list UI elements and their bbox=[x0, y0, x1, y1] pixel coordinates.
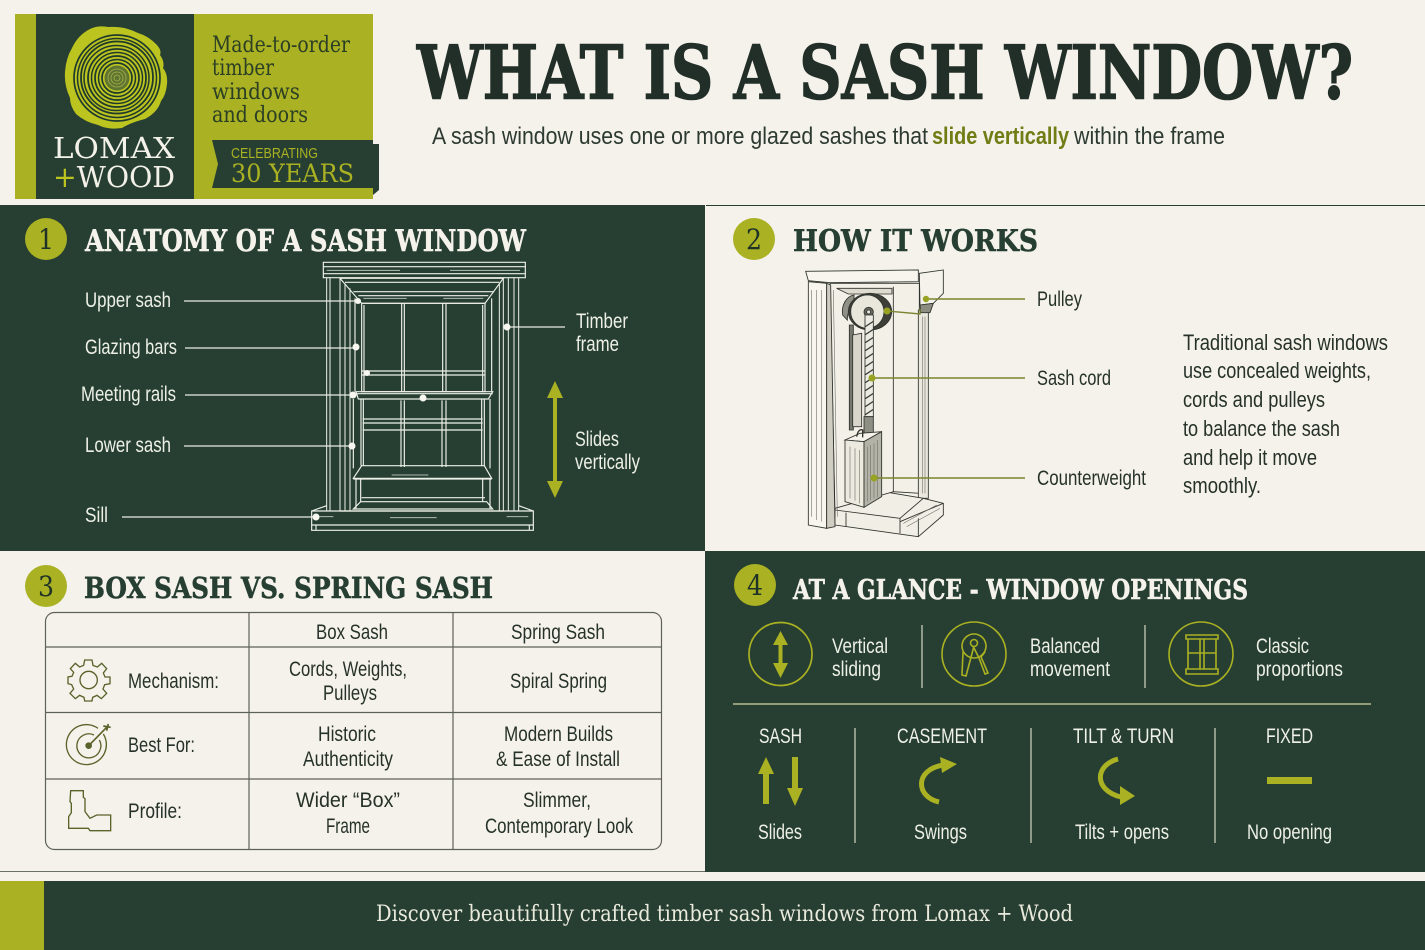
anatomy labels: Glazing bars bbox=[85, 336, 177, 359]
anniversary ribbon: 30 YEARS bbox=[231, 159, 354, 188]
heading: comparison: BOX SASH VS. SPRING SASH bbox=[84, 571, 493, 605]
table text: Frame bbox=[326, 815, 370, 838]
pulley labels bbox=[1037, 288, 1146, 490]
table text: Contemporary Look bbox=[485, 815, 633, 838]
subtitle: slide vertically bbox=[932, 123, 1070, 150]
table text: Spiral Spring bbox=[510, 670, 607, 693]
panel 2: how it works bbox=[706, 205, 1425, 537]
window type captions: No opening bbox=[1247, 821, 1332, 844]
table text: Slimmer, bbox=[523, 789, 591, 812]
number badge 1: 1 bbox=[38, 223, 54, 256]
explanation paragraph: use concealed weights, bbox=[1183, 358, 1371, 383]
table text: Modern Builds bbox=[504, 723, 613, 746]
subtitle: A sash window uses one or more glazed sashes that bbox=[432, 123, 928, 150]
anniversary ribbon: CELEBRATING bbox=[231, 145, 318, 162]
heading: how it works: HOW IT WORKS bbox=[793, 224, 1038, 259]
table text: & Ease of Install bbox=[496, 748, 620, 771]
tagline bbox=[212, 33, 351, 128]
brand name bbox=[53, 131, 175, 194]
footer banner bbox=[0, 872, 1425, 950]
pulley callout lines bbox=[872, 299, 1025, 478]
table text: Wider “Box” bbox=[296, 789, 400, 812]
table text: Best For: bbox=[128, 734, 195, 757]
window type captions: Slides bbox=[758, 821, 802, 844]
table text: Box Sash bbox=[316, 621, 388, 644]
icon: tilt and turn arrow bbox=[1100, 759, 1135, 805]
explanation paragraph bbox=[1183, 330, 1388, 498]
number badge 1 bbox=[25, 218, 67, 260]
icon: casement arrow bbox=[921, 757, 957, 802]
table text: Cords, Weights, bbox=[289, 658, 407, 681]
tagline: windows bbox=[212, 80, 300, 105]
feature labels bbox=[832, 635, 1343, 681]
number badge 2: 2 bbox=[746, 223, 762, 256]
panel 1: anatomy bbox=[0, 205, 705, 551]
window type names bbox=[759, 725, 1313, 748]
anatomy labels: Sill bbox=[85, 504, 108, 527]
number badge 4: 4 bbox=[747, 569, 763, 602]
feature labels: proportions bbox=[1256, 658, 1343, 681]
panel 3: box sash vs spring sash bbox=[25, 565, 662, 850]
logo block bbox=[15, 14, 379, 199]
feature labels: sliding bbox=[832, 658, 881, 681]
icon: classic proportions bbox=[1169, 622, 1233, 686]
comparison table bbox=[45, 612, 662, 850]
window type names: CASEMENT bbox=[897, 725, 987, 748]
anatomy labels: Lower sash bbox=[85, 434, 171, 457]
feature labels: movement bbox=[1030, 658, 1110, 681]
table text: Historic bbox=[318, 723, 376, 746]
tagline: Made-to-order bbox=[212, 33, 351, 58]
table text: Profile: bbox=[128, 800, 182, 823]
table text: Pulleys bbox=[323, 682, 377, 705]
anatomy labels: vertically bbox=[575, 451, 640, 474]
explanation paragraph: cords and pulleys bbox=[1183, 387, 1325, 412]
feature labels: Classic bbox=[1256, 635, 1309, 658]
number badge 3 bbox=[25, 565, 67, 607]
icon: vertical sliding bbox=[749, 622, 812, 686]
heading: anatomy: ANATOMY OF A SASH WINDOW bbox=[84, 224, 527, 259]
feature labels: Vertical bbox=[832, 635, 888, 658]
anatomy labels bbox=[81, 289, 640, 527]
feature labels: Balanced bbox=[1030, 635, 1100, 658]
explanation paragraph: and help it move bbox=[1183, 445, 1317, 470]
pulley callout dots bbox=[868, 296, 929, 482]
pulley labels: Sash cord bbox=[1037, 367, 1111, 390]
explanation paragraph: to balance the sash bbox=[1183, 416, 1340, 441]
anatomy labels: Meeting rails bbox=[81, 383, 176, 406]
icon: target bbox=[66, 724, 111, 765]
explanation paragraph: smoothly. bbox=[1183, 473, 1261, 498]
icon: fixed bar bbox=[1267, 777, 1312, 784]
tagline: timber bbox=[212, 56, 274, 81]
number badge 4 bbox=[734, 564, 776, 606]
anatomy labels: Slides bbox=[575, 428, 619, 451]
callout dots bbox=[312, 298, 510, 520]
window illustration bbox=[312, 262, 533, 530]
icon: gear bbox=[68, 660, 110, 701]
pulley illustration bbox=[806, 270, 943, 537]
callout lines bbox=[122, 301, 565, 517]
window type captions bbox=[758, 821, 1332, 844]
heading: at a glance: AT A GLANCE - WINDOW OPENINGS bbox=[792, 575, 1248, 606]
window type names: FIXED bbox=[1266, 725, 1313, 748]
brand name: LOMAX bbox=[53, 131, 175, 165]
number badge 3: 3 bbox=[38, 570, 54, 603]
anatomy labels: Upper sash bbox=[85, 289, 171, 312]
arrow: slides vertically bbox=[547, 381, 563, 498]
table text: Authenticity bbox=[303, 748, 393, 771]
tagline: and doors bbox=[212, 103, 308, 128]
icon: sash arrows bbox=[758, 757, 803, 806]
footer banner: Discover beautifully crafted timber sash windows from Lomax + Wood bbox=[376, 902, 1073, 927]
feature separators bbox=[922, 625, 1145, 688]
anatomy labels: frame bbox=[576, 333, 619, 356]
icon: tree rings bbox=[65, 26, 167, 129]
number badge 2 bbox=[733, 218, 775, 260]
panel 4: at a glance bbox=[705, 551, 1425, 872]
table text bbox=[128, 621, 633, 838]
window type captions: Tilts + opens bbox=[1075, 821, 1169, 844]
explanation paragraph: Traditional sash windows bbox=[1183, 330, 1388, 355]
brand name: +WOOD bbox=[53, 160, 175, 194]
icon: balanced movement bbox=[942, 622, 1006, 686]
anniversary ribbon bbox=[212, 140, 379, 195]
pulley labels: Pulley bbox=[1037, 288, 1082, 311]
icon: profile bbox=[69, 791, 111, 831]
window type captions: Swings bbox=[914, 821, 967, 844]
table text: Spring Sash bbox=[511, 621, 605, 644]
window type names: TILT & TURN bbox=[1073, 725, 1174, 748]
pulley labels: Counterweight bbox=[1037, 467, 1146, 490]
subtitle: within the frame bbox=[1073, 123, 1225, 150]
window type names: SASH bbox=[759, 725, 802, 748]
table text: Mechanism: bbox=[128, 670, 219, 693]
anatomy labels: Timber bbox=[576, 310, 628, 333]
